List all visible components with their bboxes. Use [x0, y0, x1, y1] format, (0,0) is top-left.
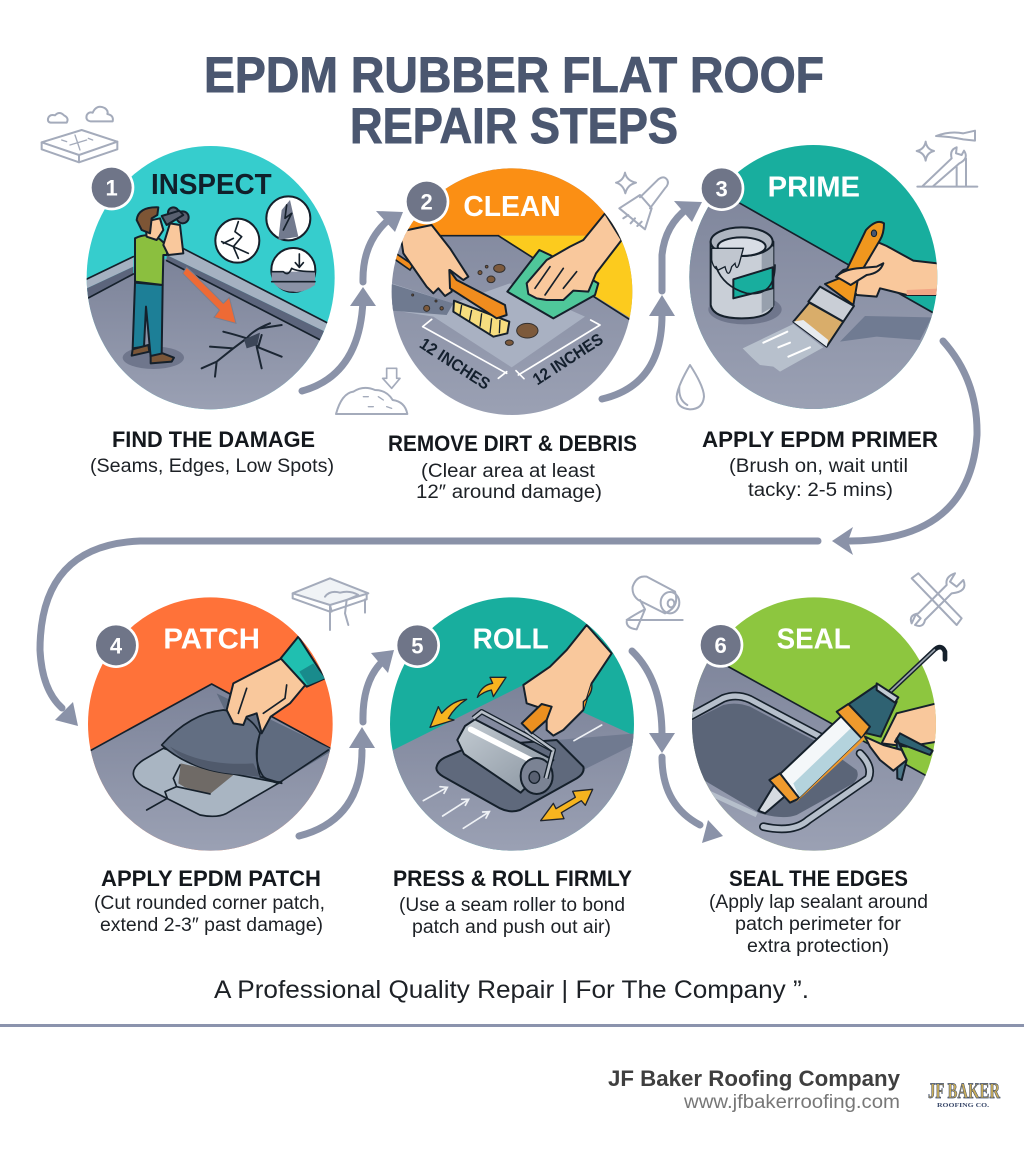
caption: step 3: (Brush on, wait until: [729, 456, 908, 477]
label: 12 inches right: 12 INCHES: [529, 330, 607, 389]
primer can: [708, 227, 782, 324]
caption: step 2: 12″ around damage): [416, 482, 602, 503]
hand: left with brush: [400, 225, 468, 296]
badge: number 1: [89, 165, 134, 210]
caption: step 6: patch perimeter for: [735, 914, 902, 935]
person with binoculars: [123, 207, 189, 369]
label: 12 inches left: 12 INCHES: [416, 334, 494, 394]
badge: number 6: [698, 622, 743, 668]
hand: right: [527, 213, 622, 300]
arrow: orange pointer: [183, 267, 236, 323]
footer: logo: ROOFING CO.: [937, 1103, 990, 1109]
caption: step 4: (Cut rounded corner patch,: [94, 893, 325, 914]
hand: [523, 625, 612, 736]
caption: step 5: patch and push out air): [412, 917, 611, 938]
footer: logo: [928, 1078, 1001, 1109]
caption: step 5: PRESS & ROLL FIRMLY: [393, 866, 632, 891]
arrow: step 2 to 3: [602, 201, 702, 399]
badge: number 4: [93, 623, 139, 668]
caption: step 4: [94, 866, 325, 936]
arrow: step 4 to 5: [299, 650, 394, 836]
caption: step 2: (Clear area at least: [421, 461, 596, 482]
panel: step 5 roll: [387, 576, 683, 853]
exposed repair area: [133, 748, 278, 816]
dimension lines: [423, 319, 600, 379]
dirt specks: [412, 264, 538, 345]
heading: inspect: INSPECT: [151, 169, 272, 201]
cleaned patch: [392, 283, 585, 367]
panel: step 4 patch: [87, 578, 368, 853]
hand: [882, 702, 943, 747]
inset: low spot: [271, 248, 315, 292]
icon: debris pile: [336, 368, 407, 414]
circle scene: [387, 163, 640, 420]
hand: [227, 658, 305, 733]
tagline: A Professional Quality Repair | For The Company ”.: [214, 976, 809, 1004]
seam roller: [457, 712, 553, 794]
title: [204, 47, 824, 154]
badge: number 4: 4: [110, 633, 123, 658]
caption: step 1: [90, 427, 334, 477]
badge: number 2: 2: [421, 190, 433, 215]
badge: number 5: [395, 623, 440, 668]
heading: roll: ROLL: [473, 623, 549, 655]
inset: torn seam: [266, 196, 310, 240]
caption: step 6: extra protection): [747, 936, 889, 957]
footer: company name: JF Baker Roofing Company: [608, 1066, 901, 1091]
heading: patch: PATCH: [163, 623, 260, 655]
rubber patch: [436, 740, 584, 811]
badge: number 6: 6: [715, 633, 727, 658]
thumb: [836, 263, 883, 285]
parapet wall: [83, 240, 328, 341]
peeled patch sheet: [162, 710, 282, 783]
caulk gun: [758, 647, 945, 813]
paint brush: [793, 222, 884, 347]
circle scene: [83, 143, 340, 413]
caption: step 6: [709, 866, 928, 957]
white airflow arrows: [423, 725, 602, 828]
heading: seal: SEAL: [777, 623, 851, 655]
footer: website: www.jfbakerroofing.com: [683, 1092, 900, 1113]
brush shadow: [840, 316, 932, 342]
caption: step 1: FIND THE DAMAGE: [112, 427, 315, 452]
icon: membrane roll: [627, 576, 683, 629]
caption: step 6: SEAL THE EDGES: [729, 866, 908, 891]
panel: step 6 seal: [680, 573, 964, 853]
badge: number 5: 5: [411, 633, 423, 658]
brush: [449, 270, 509, 337]
badge: number 1: 1: [106, 176, 118, 201]
caption: step 3: [702, 427, 938, 501]
badge: number 2: [404, 179, 449, 224]
circle scene: [387, 597, 637, 853]
icon: roof deck with patch: [293, 578, 368, 630]
caption: step 4: APPLY EPDM PATCH: [101, 866, 321, 891]
icon: crack: [202, 323, 282, 377]
icon: droplet: [677, 365, 704, 409]
title: EPDM RUBBER FLAT ROOF: [204, 47, 824, 103]
heading: clean: CLEAN: [463, 191, 561, 223]
badge: number 3: 3: [716, 176, 728, 201]
caption: step 6: (Apply lap sealant around: [709, 892, 928, 913]
circle scene: [680, 597, 943, 853]
hand: [836, 242, 943, 297]
fingers: [865, 737, 907, 771]
yellow direction arrows: [430, 677, 593, 821]
caption: step 3: tacky: 2-5 mins): [748, 480, 893, 501]
sleeve: [281, 637, 325, 687]
paint swipe: [743, 324, 823, 372]
arrow: step 3 to 4: [40, 341, 977, 726]
inset: cracked surface: [215, 219, 259, 263]
sleeve handle: [396, 254, 412, 272]
caption: step 5: [393, 866, 632, 938]
caption: step 4: extend 2-3″ past damage): [100, 915, 323, 936]
panel: step 2 clean: [336, 163, 668, 420]
badge: number 3: [699, 166, 744, 211]
circle scene: [680, 143, 943, 413]
title: REPAIR STEPS: [350, 98, 678, 154]
caption: step 5: (Use a seam roller to bond: [399, 895, 625, 916]
icon: clouds and roof slab: [42, 107, 117, 162]
caption: step 1: (Seams, Edges, Low Spots): [90, 456, 334, 477]
icon: sparkle and paint brush: [616, 173, 668, 229]
panel: step 3 prime: [677, 131, 977, 413]
heading: prime: PRIME: [768, 172, 860, 204]
rag: [507, 250, 598, 318]
caption: step 2: REMOVE DIRT & DEBRIS: [388, 431, 637, 456]
patch with sealant: [687, 696, 870, 829]
caption: step 3: APPLY EPDM PRIMER: [702, 427, 938, 452]
arrow: step 1 to 2: [302, 211, 403, 391]
panel: step 1 inspect: [42, 107, 340, 413]
icon: hammer and wrench: [917, 131, 977, 187]
circle scene: [87, 597, 335, 853]
caption: step 2: [388, 431, 637, 503]
arrow: step 5 to 6: [632, 651, 723, 843]
icon: crossed tools: [911, 573, 964, 626]
